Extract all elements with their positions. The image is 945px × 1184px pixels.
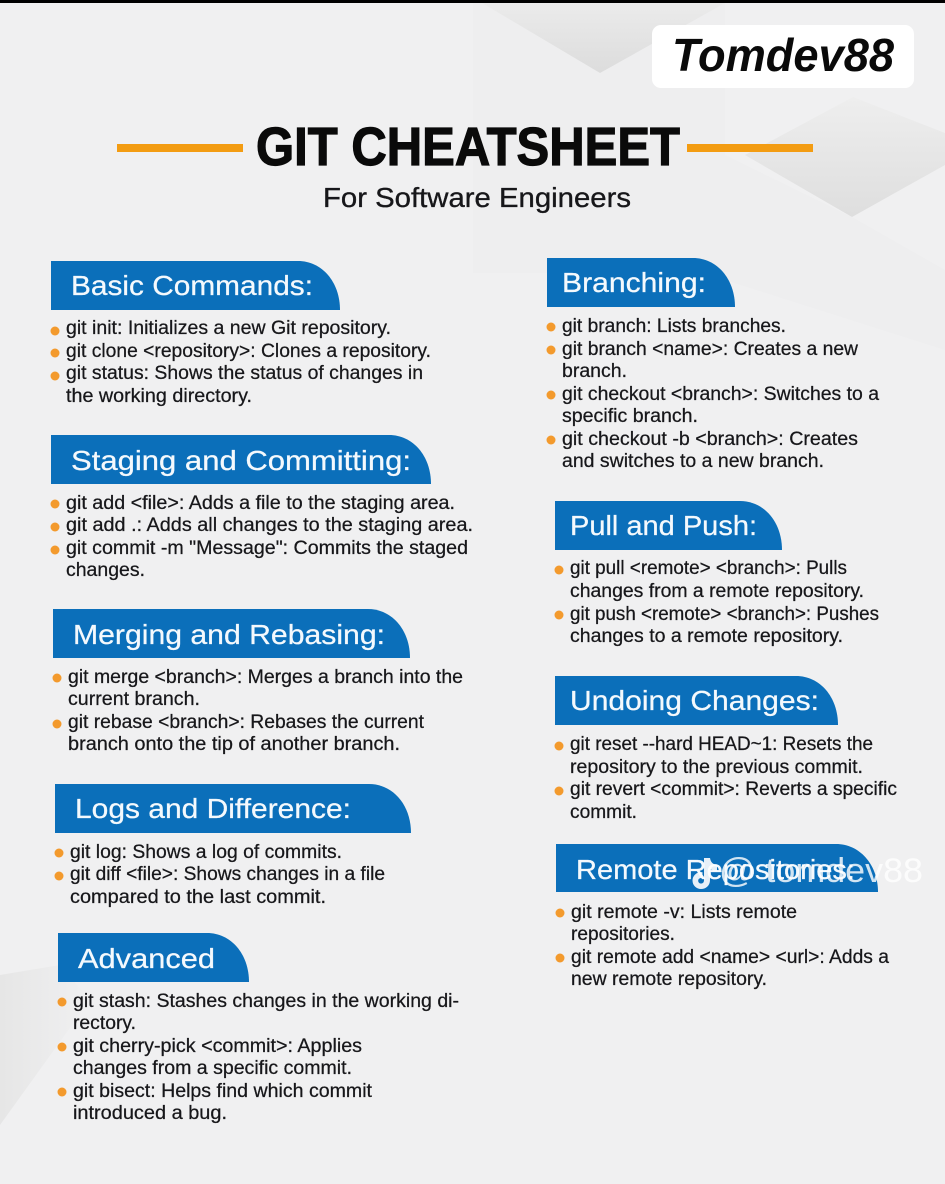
panel: Logs and Difference: git log: Shows a log of commits. [70, 842, 342, 863]
panel: Advanced: introduced a bug. [73, 1103, 227, 1124]
panel: Logs and Difference: compared to the last commit. [70, 887, 326, 908]
panel: Logs and Difference: git diff <file>: Shows changes in a file [70, 864, 385, 885]
panel: Branching: git checkout -b <branch>: Creates [562, 429, 858, 450]
panel: Branching: branch. [562, 361, 627, 382]
panel: Remote Repositories: Remote Repositories: [576, 854, 855, 885]
panel: Merging and Rebasing [52, 609, 463, 755]
panel: Basic Commands: git init: Initializes a new Git repository. [66, 318, 391, 339]
panel: Staging and Committing: Staging and Committing: [71, 445, 411, 476]
panel: Basic Commands [50, 261, 431, 407]
panel: Pull and Push [554, 501, 879, 647]
panel: Pull and Push: git pull <remote> <branch>: Pulls [570, 558, 847, 579]
panel: Staging and Committing: git add <file>: Adds a file to the staging area. [66, 493, 455, 514]
panel: Undoing Changes [554, 676, 897, 823]
panel: Undoing Changes: git reset --hard HEAD~1: Resets the [570, 734, 873, 755]
panel: Undoing Changes: repository to the previous commit. [570, 757, 863, 778]
panel: Merging and Rebasing: Merging and Rebasing: [73, 619, 385, 650]
panel: Remote Repositories [556, 844, 889, 990]
panel: Undoing Changes: Undoing Changes: [570, 685, 819, 716]
panel: Branching: Branching: [562, 267, 706, 298]
subtitle: For Software Engineers [323, 182, 631, 213]
panel: Merging and Rebasing: git merge <branch>: Merges a branch into the [68, 667, 463, 688]
panel: Advanced: git stash: Stashes changes in the working di- [73, 991, 459, 1012]
panel: Branching: and switches to a new branch. [562, 451, 824, 472]
panel: Basic Commands: Basic Commands: [71, 270, 313, 301]
panel: Staging and Committing: git add .: Adds all changes to the staging area. [66, 515, 473, 536]
panel: Pull and Push: changes from a remote repository. [570, 581, 864, 602]
panel: Advanced: rectory. [73, 1013, 136, 1034]
panel: Remote Repositories: new remote repository. [571, 969, 767, 990]
panel: Remote Repositories: git remote add <name> <url>: Adds a [571, 947, 889, 968]
panel: Staging and Committing: git commit -m "Message": Commits the staged [66, 538, 468, 559]
panel: Staging and Committing [50, 435, 473, 581]
panel: Undoing Changes: commit. [570, 802, 637, 823]
panel: Pull and Push: git push <remote> <branch>: Pushes [570, 604, 879, 625]
panel: Logs and Difference: Logs and Difference: [75, 793, 351, 824]
panel: Advanced: Advanced [78, 943, 215, 974]
panel: Staging and Committing: changes. [66, 560, 145, 581]
panel: Pull and Push: changes to a remote repository. [570, 626, 843, 647]
badge: Tomdev88: Tomdev88 [672, 29, 894, 81]
watermark: TikTok @tomdev88: @ tomdev88 [719, 852, 923, 890]
panel: Merging and Rebasing: current branch. [68, 689, 200, 710]
panel: Advanced: changes from a specific commit. [73, 1058, 352, 1079]
panel: Undoing Changes: git revert <commit>: Reverts a specific [570, 779, 897, 800]
panel: Branching: git branch: Lists branches. [562, 316, 786, 337]
panel: Pull and Push: Pull and Push: [570, 510, 757, 541]
panel: Basic Commands: git status: Shows the status of changes in [66, 363, 423, 384]
panel: Basic Commands: git clone <repository>: Clones a repository. [66, 341, 431, 362]
panel: Basic Commands: the working directory. [66, 386, 252, 407]
panel: Advanced [58, 933, 459, 1124]
panel: Merging and Rebasing: git rebase <branch>: Rebases the current [68, 712, 425, 733]
icon: TikTok note [692, 858, 717, 889]
panel: Branching: git branch <name>: Creates a new [562, 339, 858, 360]
title: GIT CHEATSHEET with orange rules: GIT CHEATSHEET [256, 117, 680, 177]
panel: Branching: git checkout <branch>: Switches to a [562, 384, 879, 405]
panel: Branching: specific branch. [562, 406, 698, 427]
title: GIT CHEATSHEET with orange rules [117, 117, 813, 177]
panel: Branching [546, 258, 879, 472]
panel: Logs and Difference [54, 784, 411, 908]
panel: Remote Repositories: repositories. [571, 924, 675, 945]
panel: Advanced: git bisect: Helps find which commit [73, 1081, 373, 1102]
panel: Merging and Rebasing: branch onto the tip of another branch. [68, 734, 400, 755]
panel: Remote Repositories: git remote -v: Lists remote [571, 902, 797, 923]
panel: Advanced: git cherry-pick <commit>: Applies [73, 1036, 362, 1057]
